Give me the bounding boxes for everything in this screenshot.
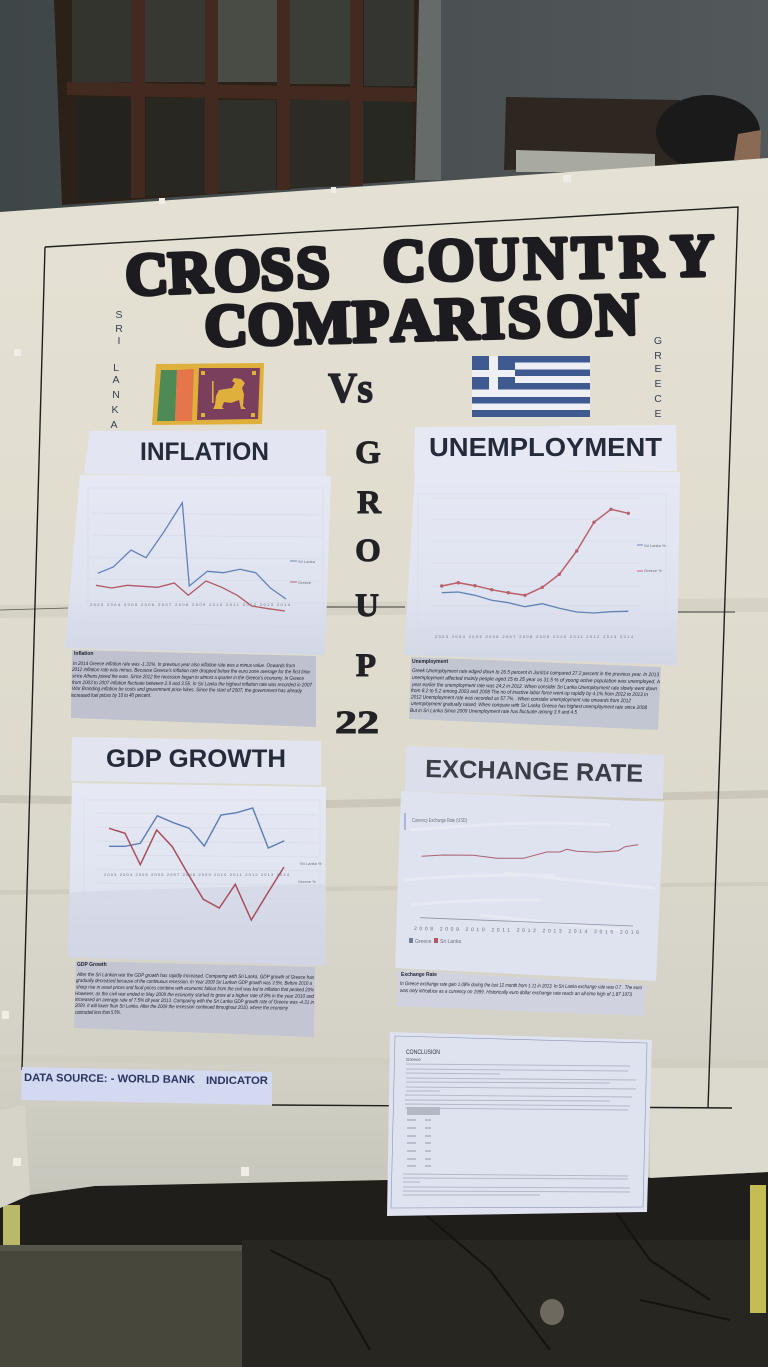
heading: GDP growth bbox=[71, 737, 321, 785]
chart: inflation line chart: 2003 2004 2005 2006 2007 2008 2009 2010 2011 2012 2013 2014 bbox=[90, 602, 291, 607]
icon: Greece flag bbox=[472, 356, 590, 417]
text block: inflation: increased fuel prices by 10 to 40 percent. bbox=[71, 693, 151, 699]
text block: exchange rate: Exchange Rate bbox=[401, 972, 437, 978]
label: Sri Lanka vertical: R bbox=[115, 323, 123, 335]
group label: Group 22 vertical bbox=[335, 435, 382, 741]
small table bbox=[407, 1107, 440, 1166]
text block: inflation: from 2003 to 2007 inflation fluctuate between 2.9 and 3.55. In Sri Lanka the highest inflation rate was recorded in 2007 bbox=[72, 680, 313, 689]
text block: unemployment: from 8.2 to 5.2 among 2003 and 2008 The no of inactive labor force went up rapidly by 4.1% from 2012 to 2013 In bbox=[411, 688, 648, 698]
chart: GDP growth line chart: Sri Lanka % bbox=[300, 861, 322, 866]
chart: GDP growth line chart: 2003 2004 2005 2006 2007 2008 2009 2010 2011 2012 2013 2014 bbox=[104, 872, 290, 877]
Vs label: Vs bbox=[328, 366, 373, 412]
text block: unemployment: unemployment gradually raised. When compare with Sri Lanka Greece has highest unemployment rate since 2008 bbox=[411, 701, 647, 711]
text block: GDP growth: After the Sri Lankan war the GDP growth has rapidly increased. Comparing with Sri Lanka, GDP growth of Greece has bbox=[76, 972, 314, 981]
text block: inflation: Inflation bbox=[74, 651, 93, 657]
chart: unemployment line chart bbox=[404, 472, 680, 665]
heading: GDP growth: GDP GROWTH bbox=[106, 745, 286, 773]
legend: exchange rate bbox=[409, 938, 461, 945]
heading: exchange rate bbox=[405, 746, 664, 799]
title: COMPARISON bbox=[204, 281, 640, 359]
chart: exchange rate line chart bbox=[395, 791, 664, 981]
label: Greece vertical: E bbox=[654, 363, 662, 375]
text block: unemployment: Unemployment bbox=[412, 659, 448, 665]
label: Greece vertical: R bbox=[654, 350, 662, 362]
text block: GDP growth: gradually decreased because of the continuous recession. In Year 2009 Sri Lankan GDP growth was 3.5%. Before 2010 a bbox=[76, 978, 312, 987]
heading: inflation: INFLATION bbox=[140, 438, 269, 466]
text block: GDP growth: contracted less than 5.5%. bbox=[75, 1010, 121, 1016]
text block: inflation: since Athens joined the euro. Since 2012 the recession began to almost a quarter in the Greece's economy. In Greece bbox=[72, 674, 304, 682]
group label: Group 22 vertical: G bbox=[355, 435, 381, 471]
chart: GDP growth line chart bbox=[68, 783, 326, 966]
label: Sri Lanka vertical: I bbox=[118, 335, 120, 347]
label: Sri Lanka vertical: A bbox=[110, 419, 118, 431]
text block: GDP growth: GDP Growth bbox=[77, 962, 107, 968]
label: Sri Lanka vertical: N bbox=[112, 389, 120, 401]
window with wooden bars bbox=[54, 0, 419, 205]
yellow easel legs bbox=[3, 1185, 766, 1313]
label: Sri Lanka vertical bbox=[110, 309, 123, 431]
panel: conclusion sheet bbox=[387, 1032, 652, 1216]
chart: exchange rate line chart: Currency Exchange Rate (USD) bbox=[412, 818, 467, 824]
label: Greece vertical: E bbox=[654, 408, 662, 420]
text block: unemployment: Greek Unemployment rate edged down to 26.5 percent in Jun014 compared 27.2 percent in the previous year. In 2013 bbox=[412, 668, 659, 678]
ground and concrete block bbox=[0, 1170, 768, 1367]
text block: exchange rate: In Greece exchange rate gain 1.08% during the last 12 month from 1.11 in 2013. In Sri Lanka exchange rate was 0.7 . The euro bbox=[400, 981, 642, 991]
text block: exchange rate: was only introduce as a currency on 1999. Historically euro dollar exchange rate reach an all-time high of 1.87 1973 bbox=[400, 988, 632, 998]
text block: GDP growth: 2009. It will lower than Sri Lanka. After the 2009 the recession continued throughout 2010, where the economy bbox=[74, 1003, 288, 1012]
label: Greece vertical bbox=[654, 335, 662, 420]
group label: Group 22 vertical: U bbox=[355, 588, 379, 624]
panel: inflation bbox=[65, 430, 331, 727]
group label: Group 22 vertical: O bbox=[355, 533, 381, 569]
chart: inflation line chart: Greece bbox=[298, 580, 312, 585]
data source label bbox=[21, 1067, 272, 1105]
data source label: INDICATOR bbox=[206, 1075, 268, 1087]
illegible body lines bbox=[403, 1064, 636, 1195]
background: wall behind the poster bbox=[0, 0, 768, 260]
text block: GDP growth: increased an average rate of 7.5% till year 2013. Comparing with the Sri Lanka GDP growth rate of Greece was -4.31 in bbox=[75, 997, 314, 1006]
subheading: Greece: Greece bbox=[406, 1057, 421, 1062]
heading: unemployment bbox=[414, 425, 677, 473]
chart: unemployment line chart: Sri Lanka % bbox=[644, 543, 666, 548]
label: Greece vertical: G bbox=[654, 335, 662, 347]
panel: unemployment bbox=[404, 425, 680, 730]
dark board and person behind the poster bbox=[504, 95, 761, 172]
text block: exchange rate bbox=[397, 970, 645, 1016]
poster border line bbox=[22, 207, 738, 1108]
title: COUNTRY bbox=[382, 222, 715, 294]
icon: Sri Lanka flag bbox=[152, 363, 264, 425]
chart: inflation line chart: Sri Lanka bbox=[298, 559, 316, 564]
text block: GDP growth: However, as the civil war ended in May 2009 the economy started to grow at a higher rate of 8% in the year 2010 and bbox=[75, 991, 315, 1000]
text block: GDP growth bbox=[74, 961, 315, 1037]
panel: exchange rate bbox=[395, 746, 664, 1016]
text block: unemployment: 2012 Unemployment rate was recorded as 57.7% . When consider unemployment rate onwards from 2012 bbox=[410, 694, 631, 704]
group label: Group 22 vertical: R bbox=[357, 485, 382, 521]
panel: GDP growth bbox=[68, 737, 326, 1037]
label: Sri Lanka vertical: A bbox=[112, 374, 120, 386]
text block: GDP growth: sharp rise in asset prices and food prices combine with economic fallout from the civil was led to inflation that peaked 20% bbox=[76, 985, 314, 993]
heading: conclusion: CONCLUSION bbox=[406, 1050, 440, 1056]
chart: unemployment line chart: 2003 2004 2005 2006 2007 2008 2009 2010 2011 2012 2013 2014 bbox=[435, 634, 634, 639]
title: CROSS bbox=[124, 234, 331, 308]
legend: exchange rate: Greece bbox=[415, 939, 432, 945]
group label: Group 22 vertical: 22 bbox=[335, 705, 379, 741]
heading: unemployment: UNEMPLOYMENT bbox=[429, 432, 662, 462]
text block: unemployment: year earlier the unemployment rate was 24.2 in 2012. When consider Sri Lanka Unemployment rate slowly went down bbox=[411, 682, 657, 692]
text block: inflation: 2012 inflation rate was minus. Because Greece's inflation rate dropped below the euro zone average for the first time bbox=[71, 667, 310, 675]
text block: inflation bbox=[71, 650, 316, 727]
label: Greece vertical: E bbox=[654, 378, 662, 390]
chart: inflation line chart bbox=[65, 475, 331, 655]
label: Greece vertical: C bbox=[654, 393, 662, 405]
label: Sri Lanka vertical: S bbox=[115, 309, 123, 321]
group label: Group 22 vertical: P bbox=[356, 648, 376, 684]
heading: inflation bbox=[84, 430, 326, 476]
label: Sri Lanka vertical: K bbox=[111, 404, 119, 416]
text block: inflation: War Branding inflation be costs and government price hikes. Since the start of 2007, the government has already bbox=[72, 686, 302, 694]
data source label: DATA SOURCE: - WORLD BANK bbox=[24, 1072, 195, 1086]
text block: inflation: In 2014 Greece inflation rate was -1.31%. In previous year also inflation rate was a minus value. Onwards from bbox=[73, 661, 296, 669]
chart: unemployment line chart: Greece % bbox=[644, 568, 662, 573]
text block: unemployment: But in Sri Lanka Since 2009 Unemployment rate has fluctuate among 3.9 and 4.5 bbox=[410, 708, 577, 716]
heading: exchange rate: EXCHANGE RATE bbox=[425, 755, 643, 788]
text block: unemployment: unemployment affected mainly people aged 15 to 25 year as 31.5 % of young active population was unemployed. A bbox=[412, 675, 661, 685]
label: Sri Lanka vertical: L bbox=[113, 362, 119, 374]
chart: exchange rate line chart: 2008 2009 2010 2011 2012 2013 2014 2015 2016 bbox=[414, 926, 639, 936]
legend: exchange rate: Sri Lanka bbox=[440, 939, 461, 945]
text block: unemployment bbox=[409, 657, 661, 730]
chart: GDP growth line chart: Greece % bbox=[298, 879, 316, 884]
title bbox=[124, 222, 715, 359]
poster sheet bbox=[0, 158, 768, 1208]
